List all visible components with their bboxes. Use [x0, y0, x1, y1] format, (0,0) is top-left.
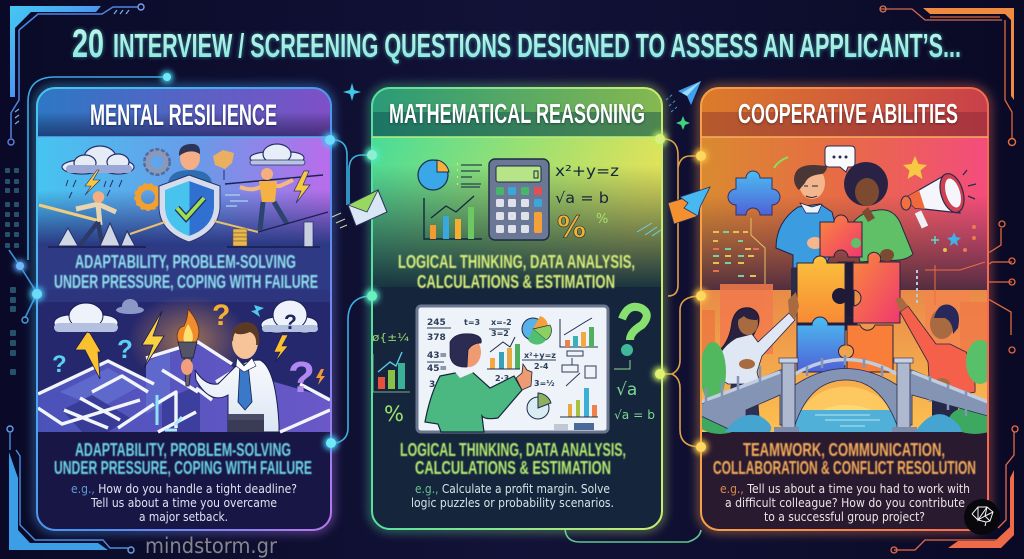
- icon: figure on tilted beam with spikes: [39, 191, 146, 247]
- icon: blue puzzle piece: [728, 171, 780, 215]
- panel 3 border: [701, 88, 988, 530]
- watermark: mindstorm.gr: [145, 534, 277, 558]
- figure: man with tie: [195, 322, 279, 432]
- panel 1 header band: [37, 88, 331, 137]
- icon: whiteboard: t=3: [464, 318, 480, 327]
- example text: panel 3: a difficult colleague? How do you contribute: [725, 495, 965, 510]
- formulas: calculator side: x²+y=z: [555, 162, 619, 180]
- icons: clouds, lightning and question marks: [53, 299, 325, 392]
- icon: interlocking puzzle pieces: [797, 215, 900, 372]
- subtitle: panel 2 lower: CALCULATIONS & ESTIMATION: [415, 458, 611, 478]
- icon: whiteboard: 3: [429, 380, 435, 390]
- subtitle: panel 2 lower: LOGICAL THINKING, DATA ANALYSIS,: [400, 440, 626, 460]
- circuit frame: right side traces: [965, 221, 1015, 353]
- icon: gears: [136, 151, 168, 210]
- panel: mental resilience: [37, 88, 331, 530]
- circuit frame: bottom left: [7, 426, 134, 553]
- icon: megaphone: [901, 170, 976, 227]
- badge: brain logo: [964, 499, 1000, 535]
- icon: dart arrow: [637, 187, 710, 236]
- icons: clouds, lightning and question marks: ?: [288, 353, 315, 402]
- panel 1 upper scene background: [38, 138, 330, 242]
- example text: panel 1: e.g., How do you handle a tight deadline?: [71, 481, 297, 496]
- icon: whiteboard: 45=: [427, 364, 447, 374]
- figure: presenter at whiteboard: [425, 334, 532, 432]
- subtitle: panel 1 lower: [54, 440, 312, 478]
- icons: math doodles left of board: [372, 331, 410, 426]
- icon: flaming torch: [177, 309, 199, 386]
- icons: math doodles left of board: %: [384, 402, 404, 426]
- icon: whiteboard: [417, 306, 608, 432]
- connector lines: [9, 77, 701, 542]
- subtitle: panel 2 lower: [400, 442, 626, 475]
- icon: whiteboard: x²+y=z: [524, 351, 556, 360]
- decorative dot grid left: [5, 168, 19, 375]
- panel 3 header band: [701, 88, 988, 137]
- example text: panel 1: a major setback.: [139, 509, 228, 524]
- subtitle: panel 2 upper: [398, 254, 635, 289]
- city backdrop: [702, 284, 987, 356]
- formulas: calculator side: [556, 165, 618, 238]
- icon: person behind shield: [159, 144, 234, 242]
- icon: whiteboard: 43=: [427, 351, 447, 361]
- icons: question mark and root formulas: √a: [616, 380, 637, 400]
- figure: man right: [895, 298, 975, 432]
- example text: panel 1: [71, 481, 297, 524]
- icons: chat bubble, star and tick: [774, 146, 961, 246]
- illustration: bridge over water: [701, 355, 988, 432]
- panel 3 upper scene background: [701, 137, 988, 297]
- icon: whiteboard: 378: [427, 333, 446, 343]
- panel 2 header band: [372, 88, 662, 137]
- title: 20: [72, 22, 104, 66]
- heading: mathematical reasoning: MATHEMATICAL REASONING: [389, 98, 645, 129]
- icons: clouds, lightning and question marks: ?: [212, 299, 230, 332]
- panel: mathematical reasoning: [372, 88, 662, 529]
- panel glows: [37, 88, 988, 530]
- circuit frame: bottom right: [891, 426, 1018, 553]
- icon: whiteboard: 2-4: [534, 362, 549, 371]
- subtitle: panel 1 lower: UNDER PRESSURE, COPING WITH FAILURE: [54, 458, 312, 478]
- formulas: calculator side: %: [596, 212, 608, 227]
- subtitle: panel 3: TEAMWORK, COMMUNICATION,: [743, 440, 945, 460]
- icons: math doodles left of board: ø{±¼: [372, 331, 409, 344]
- panel: cooperative abilities: [696, 88, 1001, 530]
- icon: pie chart and legend: [418, 160, 482, 190]
- panel 1 border: [37, 88, 331, 530]
- panel 1 lower scene background: [38, 297, 330, 398]
- subtitle: panel 2 upper: CALCULATIONS & ESTIMATION: [417, 272, 615, 292]
- example text: panel 2: [412, 484, 613, 510]
- icons: clouds, lightning and question marks: ?: [117, 334, 133, 364]
- subtitle: panel 1 upper: [54, 252, 318, 292]
- icon: whiteboard: 3=½: [534, 378, 555, 388]
- icons: question mark and root formulas: [614, 307, 655, 422]
- subtitle: panel 1 upper: UNDER PRESSURE, COPING WITH FAILURE: [54, 272, 318, 292]
- subtitle: panel 1 lower: ADAPTABILITY, PROBLEM-SOLVING: [75, 440, 291, 460]
- subtitle: panel 1 upper: ADAPTABILITY, PROBLEM-SOLVING: [75, 252, 296, 272]
- example text: panel 3: to a successful group project?: [764, 509, 925, 524]
- illustration: maze: [37, 342, 330, 432]
- illustration: trees: [696, 340, 1001, 434]
- formulas: calculator side: √a = b: [555, 189, 609, 207]
- subtitle: panel 2 upper: LOGICAL THINKING, DATA ANALYSIS,: [398, 252, 635, 272]
- icon: whiteboard: 245: [427, 318, 446, 328]
- icon: storm cloud left: [62, 146, 134, 198]
- icons: question mark and root formulas: √a = b: [614, 408, 655, 422]
- icon: whiteboard: 2·3: [495, 374, 509, 383]
- icon: sparkle blue: [343, 83, 361, 101]
- example text: panel 3: e.g., Tell us about a time you had to work with: [720, 481, 970, 496]
- icon: sparkle green: [676, 116, 690, 130]
- heading: mental resilience: MENTAL RESILIENCE: [90, 99, 277, 132]
- panel 2 upper scene background: [372, 137, 662, 287]
- subtitle: panel 3: [713, 440, 976, 478]
- icon: envelope: [332, 190, 387, 228]
- example text: panel 2: e.g., Calculate a profit margin. Solve: [415, 481, 610, 496]
- icon: whiteboard: 3=2: [491, 329, 509, 338]
- icons: clouds, lightning and question marks: ?: [284, 311, 297, 334]
- figure: woman with afro: [844, 162, 913, 262]
- example text: panel 3: [720, 481, 970, 524]
- figure: man in blue sweater: [776, 165, 838, 298]
- icon: whiteboard: x=-2: [491, 318, 512, 327]
- panel 2 border: [372, 88, 662, 529]
- connector nodes: [14, 71, 708, 454]
- circuit frame: top left: [8, 4, 144, 145]
- data dots backdrop: [713, 218, 985, 305]
- formulas: calculator side: %: [557, 210, 586, 244]
- icons: clouds, lightning and question marks: ?: [52, 351, 67, 378]
- icon: balancing figure on tightrope: [130, 144, 328, 247]
- example text: panel 2: logic puzzles or probability scenarios.: [411, 495, 614, 510]
- icon: bar chart with arrow: [424, 196, 482, 239]
- example text: panel 1: Tell us about a time you overcame: [90, 495, 277, 510]
- figure: woman left: [716, 292, 799, 425]
- circuit frame: top right: [880, 6, 1016, 146]
- icon: calculator: [489, 159, 549, 240]
- icon: paper plane top: [666, 81, 701, 112]
